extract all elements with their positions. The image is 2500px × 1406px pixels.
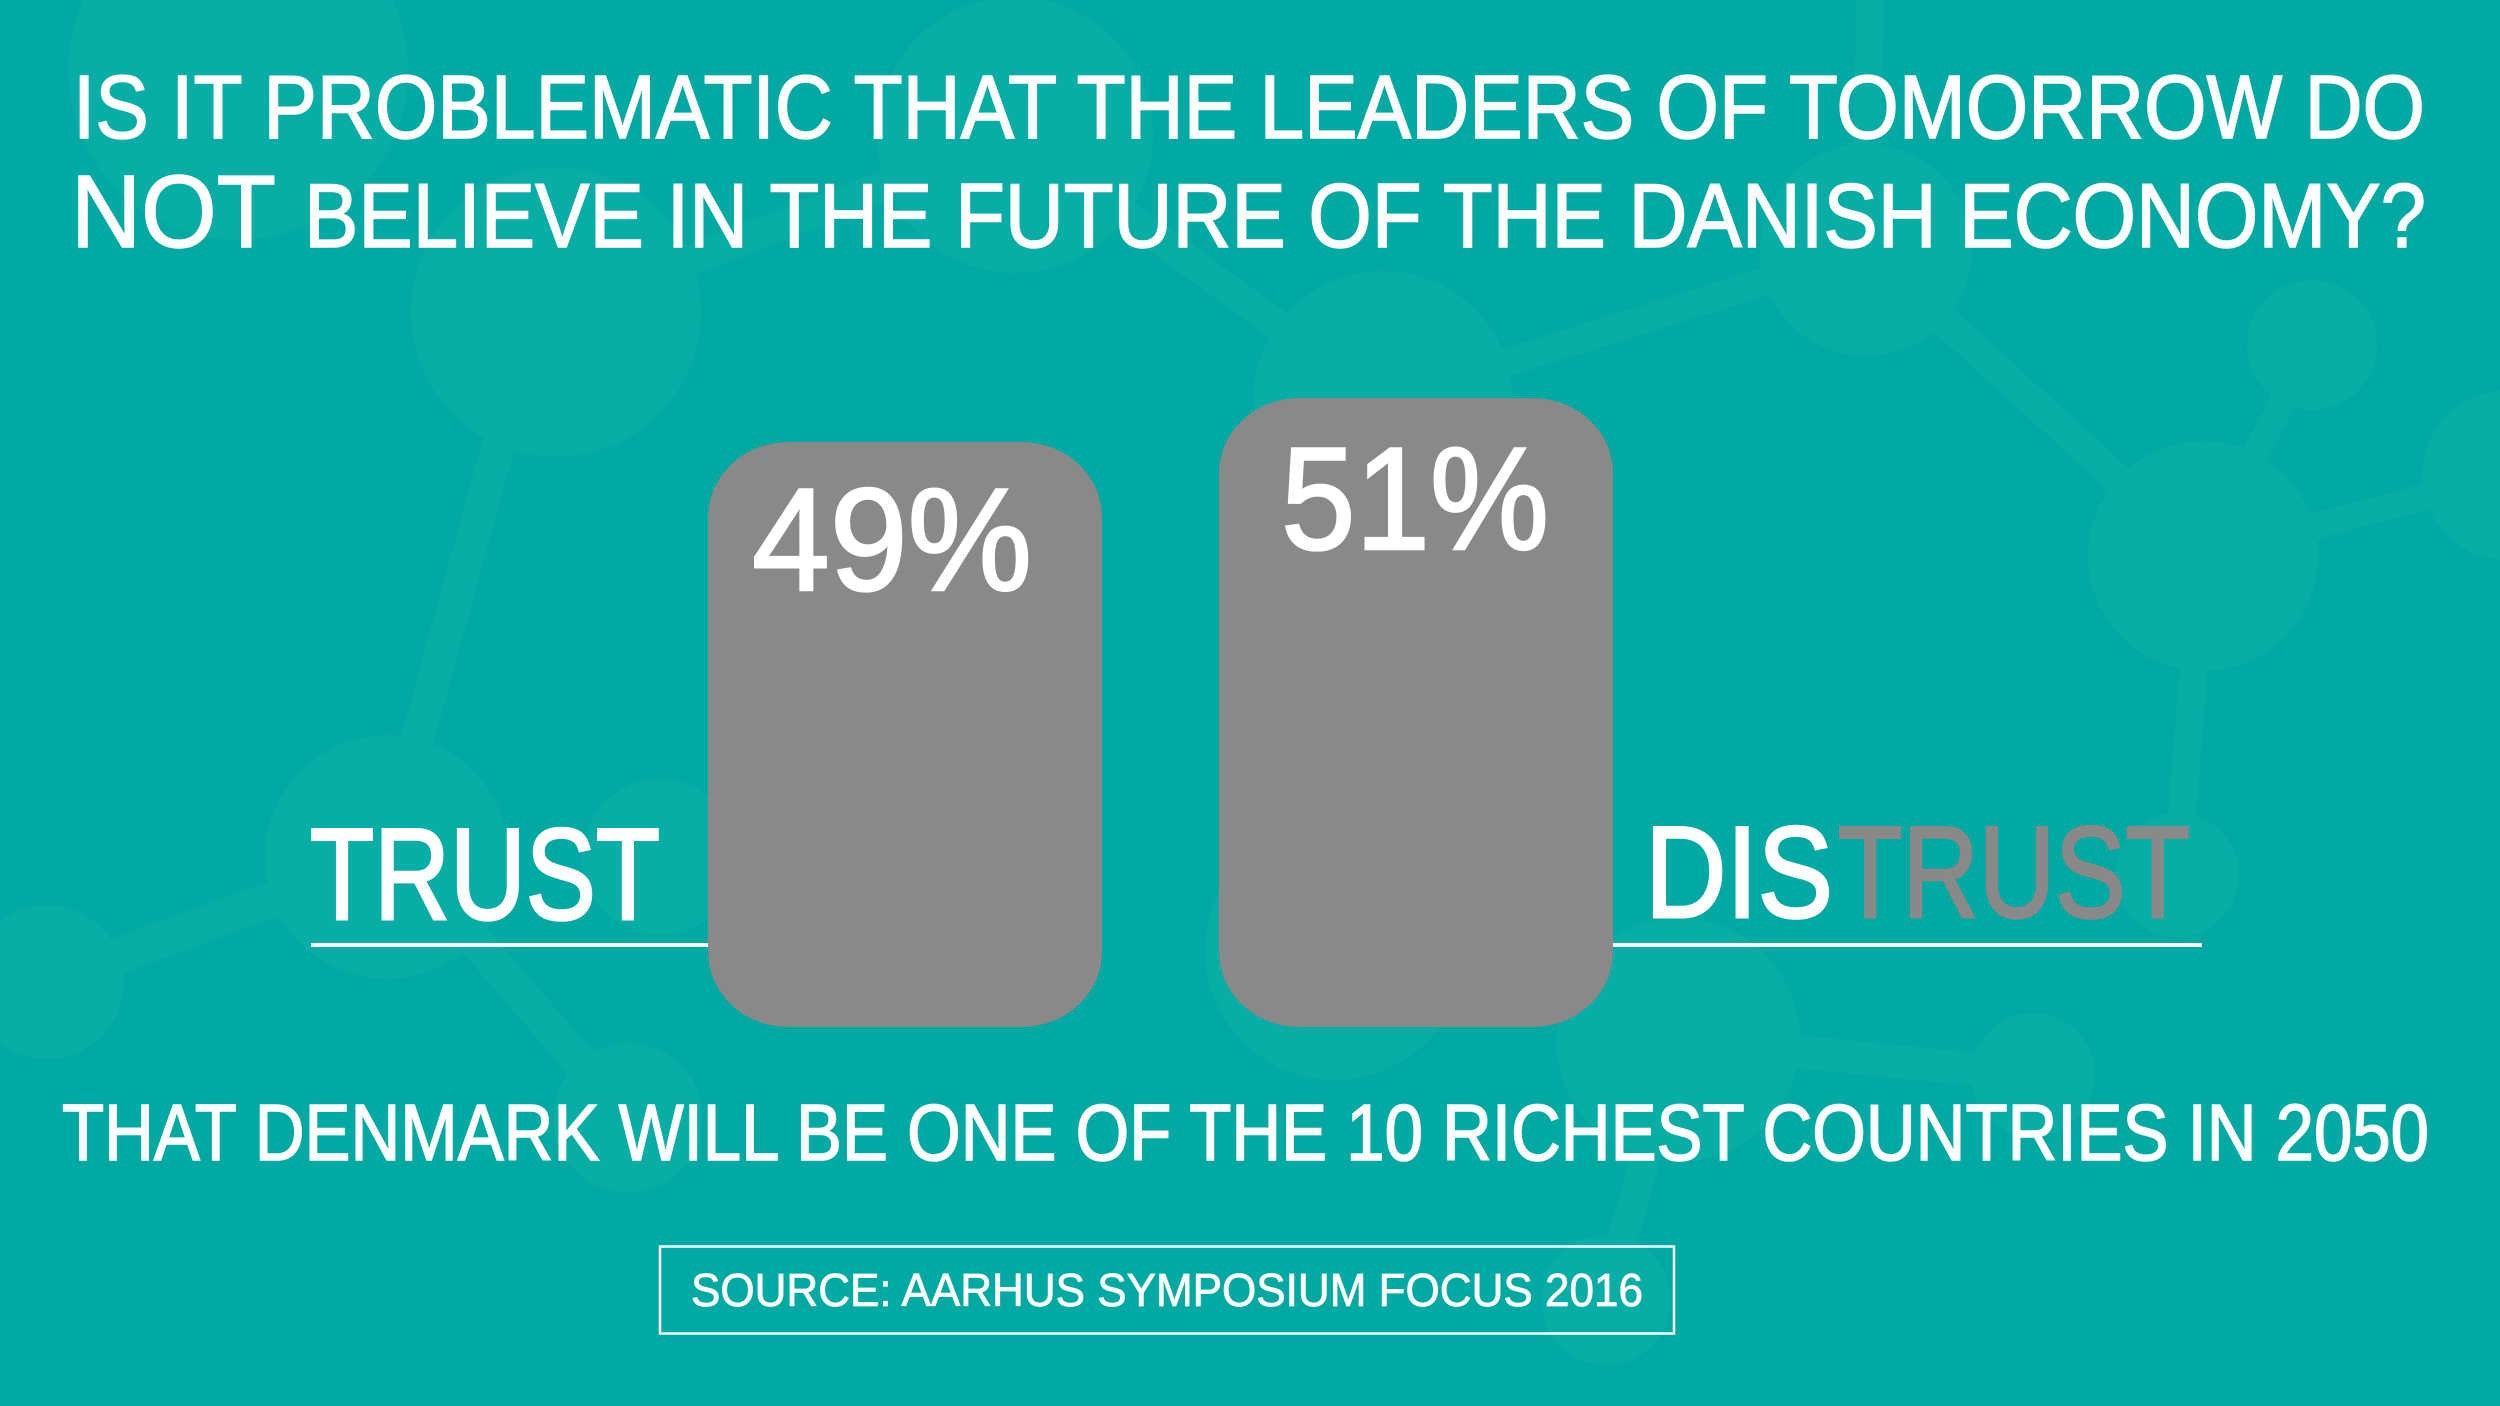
label: distrust: DIS — [1645, 799, 1833, 945]
label: distrust: TRUST — [1838, 799, 2190, 945]
trust underline — [311, 943, 711, 947]
bar: trust 49% — [708, 442, 1102, 1027]
value: 49%: 49% — [752, 458, 1032, 621]
value: 51%: 51% — [1281, 417, 1549, 580]
source box — [660, 1246, 1674, 1334]
distrust underline — [1611, 943, 2202, 947]
title — [71, 58, 2426, 269]
title emphasis: NOT: NOT — [71, 154, 276, 269]
bar: distrust 51% — [1219, 398, 1613, 1027]
label: distrust — [1645, 799, 2190, 945]
source text: SOURCE: AARHUS SYMPOSIUM FOCUS 2016 — [691, 1264, 1643, 1316]
label: trust: TRUST — [310, 801, 660, 947]
